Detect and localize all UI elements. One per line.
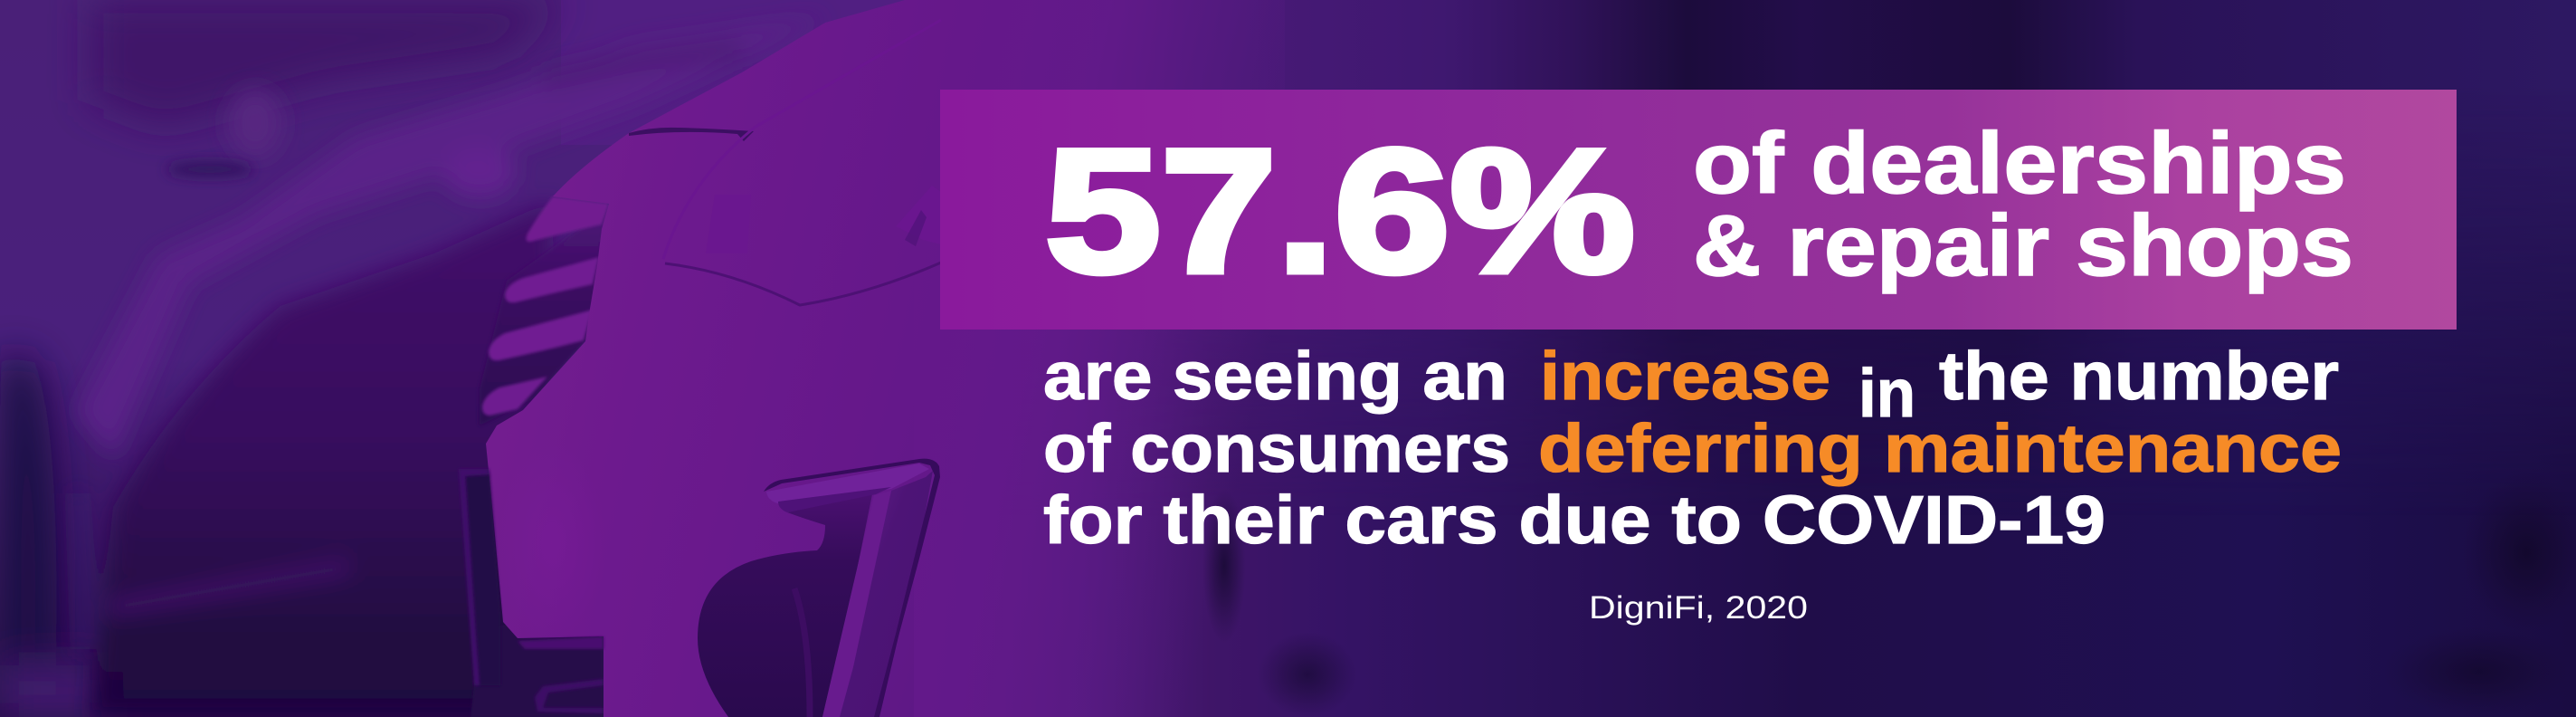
under-body dark area (471, 625, 604, 717)
blurred car in background (0, 0, 914, 717)
line 1 end: the number (1939, 338, 2339, 414)
car front body (486, 0, 1285, 717)
source citation: DigniFi, 2020 (1589, 590, 1808, 626)
headlight inner detail (706, 195, 751, 253)
headlight outline (663, 20, 941, 259)
left bumper strip (459, 469, 604, 685)
top arm (766, 464, 929, 505)
word: in: in (1858, 355, 1915, 431)
headlight lower edge (665, 263, 941, 305)
chrome air intake (698, 459, 940, 717)
bumper glow (498, 444, 606, 643)
intake cavity (698, 494, 872, 717)
line 2 start: of consumers (1043, 410, 1510, 486)
chrome blade (840, 471, 933, 717)
stat label line 2: & repair shops (1693, 197, 2353, 294)
light diagonal band (75, 34, 758, 451)
hood (90, 201, 566, 717)
vent rib 4 (482, 377, 547, 416)
background gradient (957, 0, 2576, 717)
top crease (629, 128, 754, 141)
vent rib 2 (505, 257, 599, 302)
dark outline (764, 459, 940, 717)
highlight panel (940, 90, 2457, 330)
big stat: 57.6% (1045, 113, 1635, 310)
highlight: deferring maintenance: deferring maintenance (1538, 410, 2342, 486)
highlight: increase: increase (1540, 338, 1830, 414)
line 1 start: are seeing an (1043, 338, 1507, 414)
vent rib 1 (527, 196, 609, 242)
line 3: for their cars due to COVID-19 (1043, 482, 2105, 558)
car grille vents (480, 196, 609, 425)
stat label line 1: of dealerships (1693, 115, 2346, 212)
vent rib 3 (489, 310, 593, 360)
hatched strip (822, 491, 891, 717)
body statement (1043, 338, 2342, 558)
